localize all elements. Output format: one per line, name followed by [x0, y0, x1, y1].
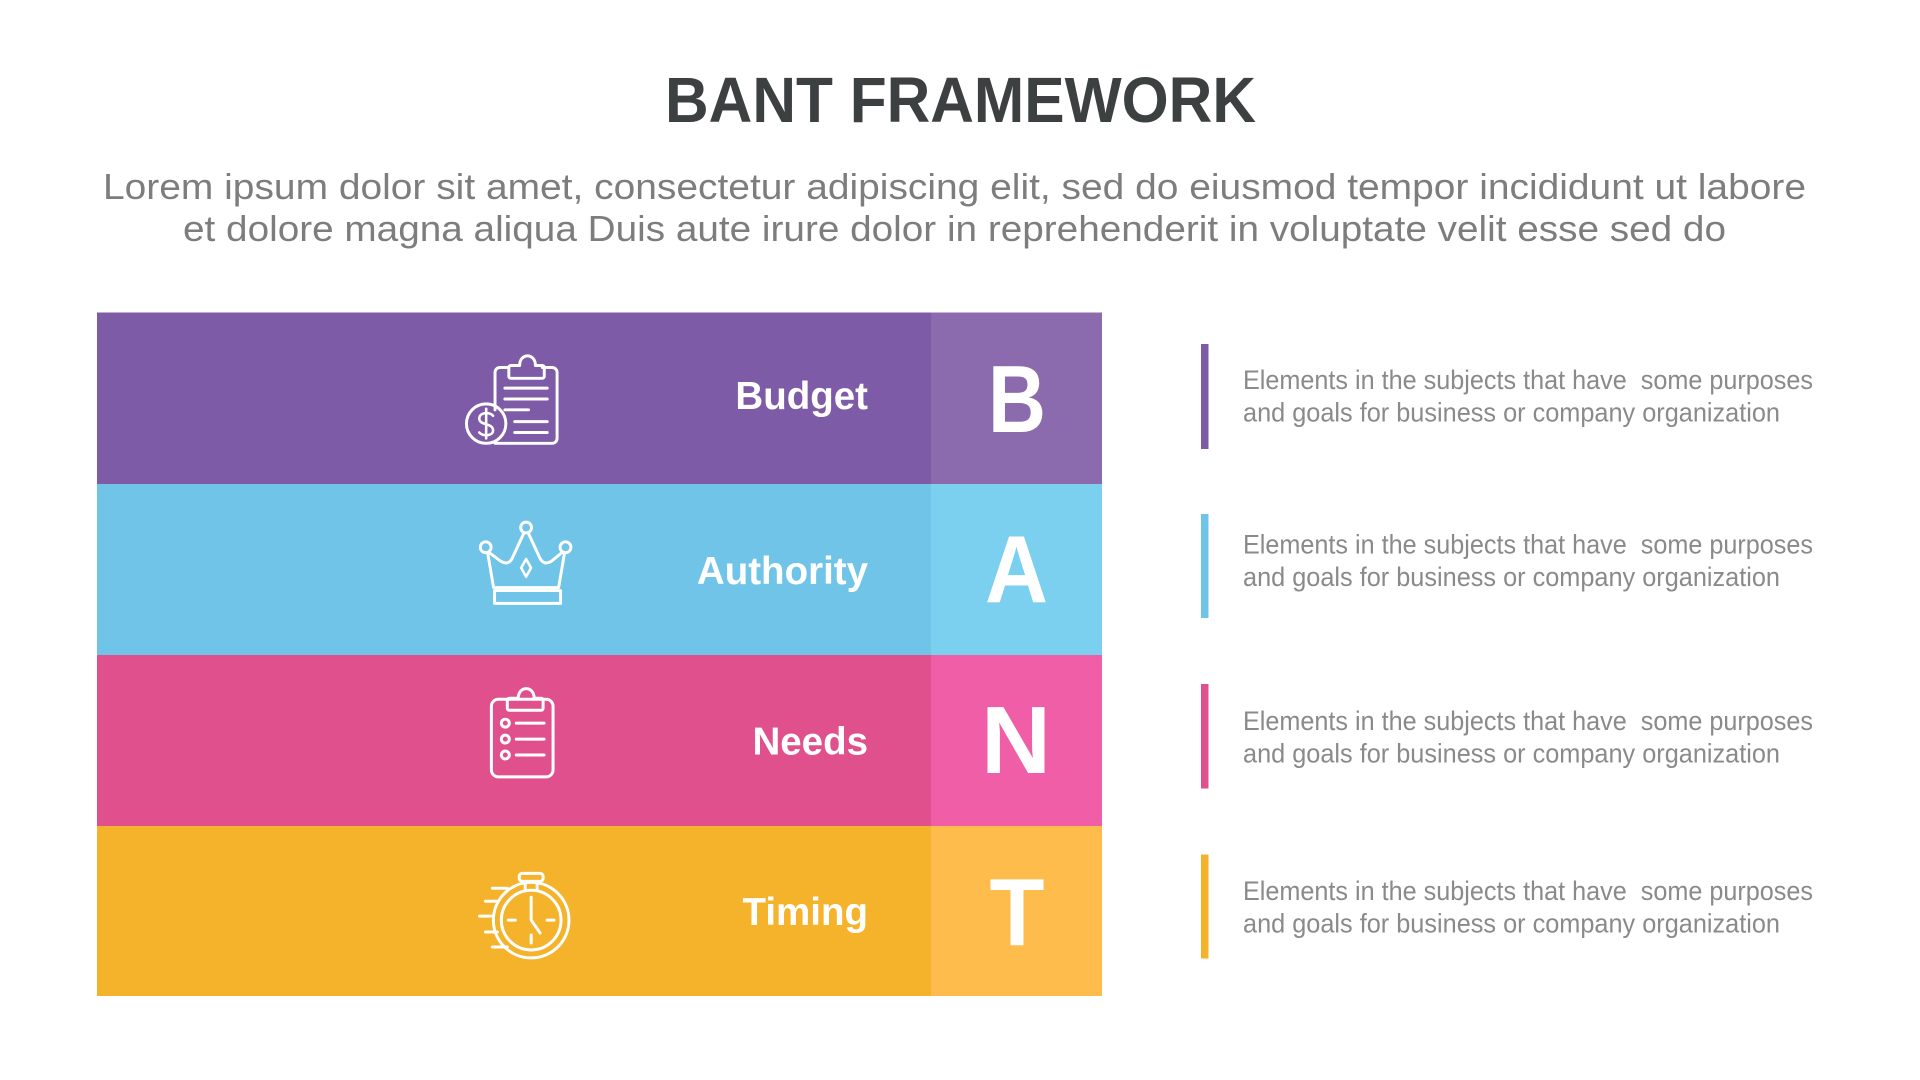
description: authority: [1201, 514, 1813, 618]
description: timing: and goals for business or company organization: [1243, 908, 1780, 938]
description: budget: and goals for business or company organization: [1243, 398, 1780, 428]
panel: timing row: [97, 826, 1102, 996]
description: needs: Elements in the subjects that have some purposes: [1243, 706, 1813, 736]
label: Budget: Budget: [735, 375, 868, 418]
title: BANT FRAMEWORK: [665, 64, 1256, 136]
description: budget: Elements in the subjects that have some purposes: [1243, 365, 1813, 395]
description: budget: [1201, 344, 1813, 449]
icon: checklist clipboard: [491, 689, 553, 777]
icon: stopwatch: [479, 873, 569, 958]
panel: needs row: [97, 655, 1102, 826]
letter B: B: [988, 346, 1046, 453]
subtitle: et dolore magna aliqua Duis aute irure dolor in reprehenderit in voluptate velit esse sed do: [183, 208, 1726, 249]
description: timing: Elements in the subjects that have some purposes: [1243, 876, 1813, 906]
icon: budget clipboard and coin: [466, 356, 557, 443]
label: Authority: Authority: [697, 550, 869, 593]
letter T: T: [990, 859, 1044, 966]
description: authority: and goals for business or company organization: [1243, 562, 1780, 592]
letter N: N: [981, 687, 1051, 794]
icon: crown: [480, 522, 571, 603]
description: needs: [1201, 684, 1813, 788]
subtitle: Lorem ipsum dolor sit amet, consectetur adipiscing elit, sed do eiusmod tempor incididunt ut labore: [103, 166, 1806, 207]
label: Needs: Needs: [752, 720, 868, 764]
subtitle: [103, 166, 1806, 249]
panel: budget row: [97, 312, 1102, 484]
description: timing: [1201, 854, 1813, 958]
panel: authority row: [97, 484, 1102, 655]
letter A: A: [985, 516, 1048, 624]
description: authority: Elements in the subjects that have some purposes: [1243, 530, 1813, 560]
description: needs: and goals for business or company organization: [1243, 738, 1780, 768]
label: Timing: Timing: [743, 891, 868, 934]
